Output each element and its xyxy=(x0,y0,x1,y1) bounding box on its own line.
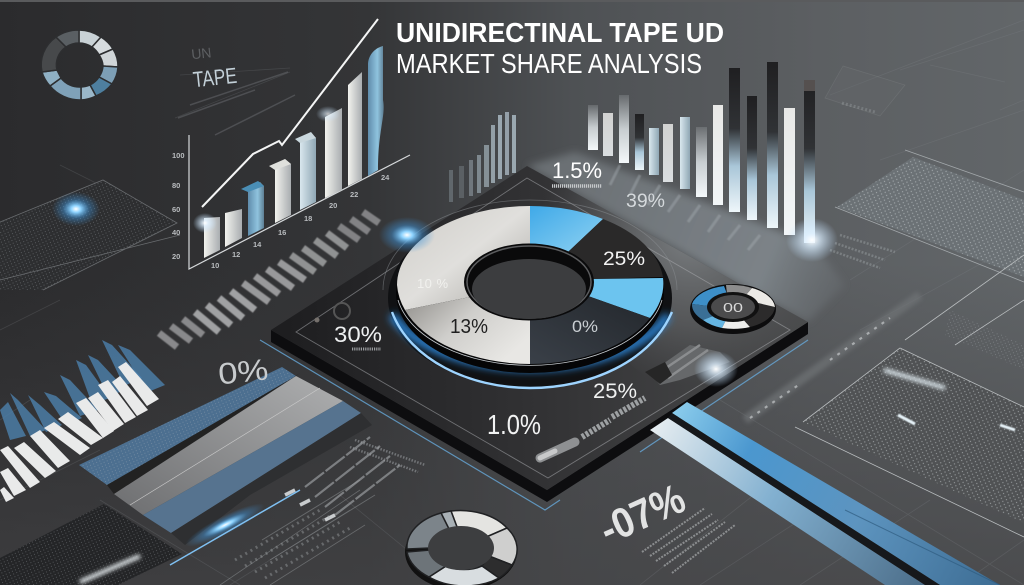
chart bars xyxy=(204,46,384,258)
axis labels: 60 xyxy=(172,205,180,214)
label: 1.5%: 1.5% xyxy=(552,158,602,183)
chart axes xyxy=(189,135,410,269)
trend line xyxy=(202,19,378,207)
axis labels: 22 xyxy=(350,190,358,199)
icon: top-left segmented donut xyxy=(41,30,118,100)
panel: upper-left halftone xyxy=(0,180,180,290)
slice: blue top xyxy=(530,206,603,252)
axis labels: 18 xyxy=(304,214,312,223)
donut labels: 0% xyxy=(572,317,598,336)
donut labels: 10 % xyxy=(417,276,448,291)
panel: lower-right halftone upper strip xyxy=(745,295,1024,420)
icon: platform controls xyxy=(540,345,730,458)
axis labels: 10 xyxy=(211,261,219,270)
donut side wall xyxy=(396,213,664,373)
heading: TAPE label: TAPE xyxy=(192,63,238,92)
axis labels: 40 xyxy=(172,228,180,237)
donut labels xyxy=(417,249,645,338)
icon: small donut on platform xyxy=(690,284,776,334)
text block: faint lines under TAPE xyxy=(178,72,295,135)
label: 30%: 30% xyxy=(334,322,382,347)
label: 1.0%: 1.0% xyxy=(487,409,541,440)
slice: blue right xyxy=(588,278,663,318)
axis labels xyxy=(172,151,390,270)
panel: blue edge line of platform xyxy=(260,340,808,510)
title: MARKET SHARE ANALYSIS xyxy=(396,48,702,79)
slice: navy xyxy=(530,296,650,364)
band: right bars base ripple xyxy=(527,152,845,322)
title xyxy=(396,17,724,79)
label: 39%: 39% xyxy=(626,191,665,212)
panel: lower-right halftone xyxy=(795,255,1024,537)
axis labels: 80 xyxy=(172,181,180,190)
panel: upper-right halftone xyxy=(835,150,1024,282)
axis labels: 14 xyxy=(253,240,262,249)
axis labels: 16 xyxy=(278,228,286,237)
heading: TAPE label: UN xyxy=(191,44,212,62)
panel: lower centre table xyxy=(220,437,425,585)
tape: blue strips xyxy=(650,402,1000,585)
donut hole xyxy=(464,244,594,320)
panel: centre-left bands xyxy=(79,367,372,545)
text block: scribbles by -07% xyxy=(642,508,735,573)
donut labels: 25% xyxy=(603,249,645,270)
label: 0% left: 0% xyxy=(217,353,270,392)
bar chart: top-right vertical bars xyxy=(588,62,815,243)
bar chart: mid translucent bars xyxy=(449,112,516,202)
label: -07% bottom: -07% xyxy=(592,474,692,553)
axis labels: 20 xyxy=(329,201,337,210)
glow: right bars base xyxy=(786,218,838,262)
icon: bottom donut xyxy=(405,510,517,585)
chart: main donut xyxy=(383,200,677,388)
label: 25% lower: 25% xyxy=(593,380,637,403)
glows xyxy=(52,106,738,565)
slice: silver lower xyxy=(405,297,530,364)
bar chart: faded bars under line chart xyxy=(159,212,379,347)
slice: dark xyxy=(568,219,663,279)
axis labels: 12 xyxy=(232,250,240,259)
bar chart: growth bars with axes xyxy=(172,19,410,270)
heading: TAPE label xyxy=(190,42,238,92)
icon: small donut on platform: 00 xyxy=(723,300,743,315)
label: 30% xyxy=(314,303,382,349)
glow ring xyxy=(383,200,677,388)
axis labels: 24 xyxy=(381,173,390,182)
axis labels: 20 xyxy=(172,252,180,261)
panel: bottom-left halftone xyxy=(0,504,182,585)
panel: small grid text upper right xyxy=(825,66,905,268)
title: UNIDIRECTINAL TAPE UD xyxy=(396,17,724,48)
axis labels: 100 xyxy=(172,151,185,160)
panel: main platform xyxy=(271,166,808,502)
bar chart: isometric bars bottom left xyxy=(0,340,165,502)
slice: silver upper xyxy=(397,206,530,310)
donut labels: 13% xyxy=(450,316,488,338)
